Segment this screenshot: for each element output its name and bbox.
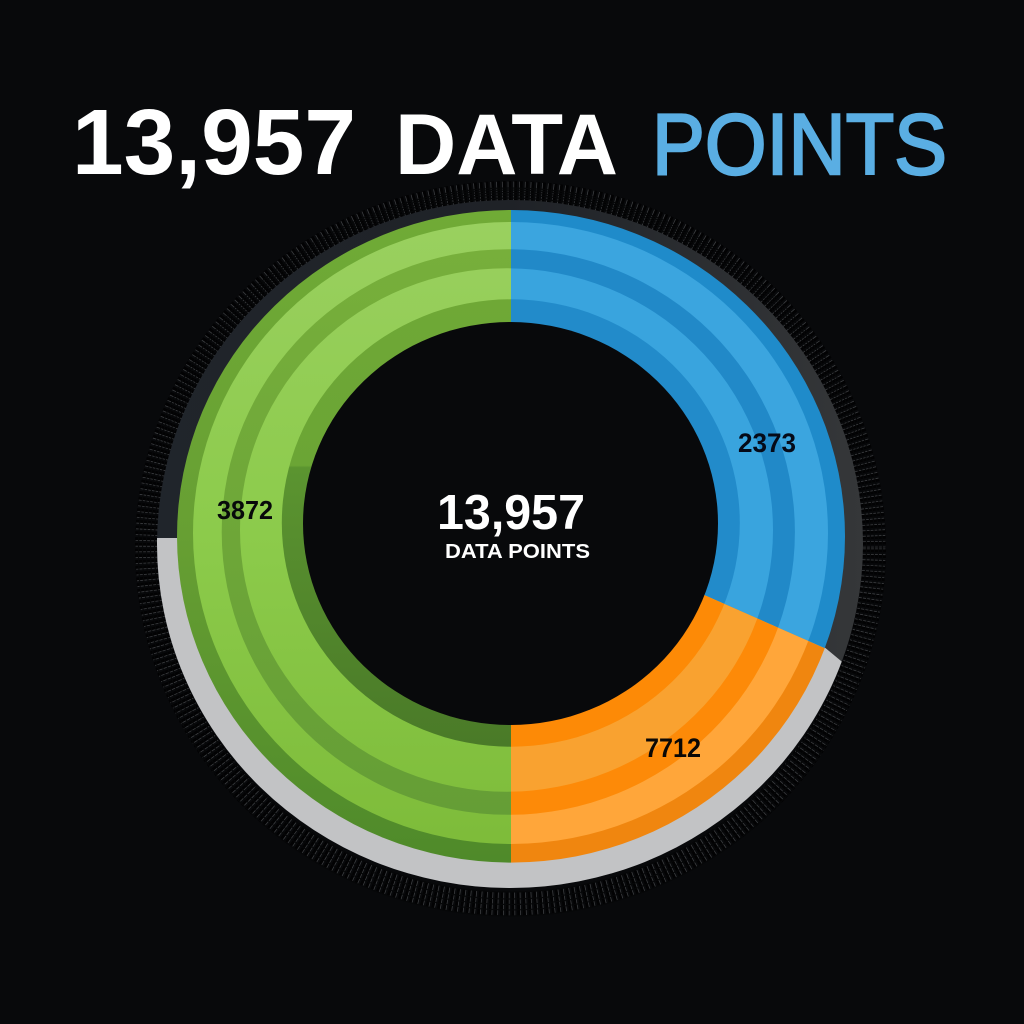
dark outer track: [157, 200, 863, 888]
segment: blue 2373: [511, 210, 845, 648]
centre total: 13,957: [437, 486, 585, 540]
label: 3872: 3872: [217, 495, 273, 525]
outer tick ring: [138, 188, 882, 916]
donut hole: [303, 322, 718, 725]
label: 7712: 7712: [645, 733, 701, 763]
infographic canvas: [78, 109, 944, 916]
centre total: DATA POINTS: [445, 541, 590, 563]
segment: green 3872: [177, 210, 511, 863]
label: 2373: 2373: [738, 428, 796, 458]
title: [72, 90, 947, 194]
centre total: [437, 486, 590, 563]
title: DATA: [395, 97, 618, 193]
segment: orange 7712: [511, 595, 825, 863]
grey outer arc: [157, 538, 842, 888]
title: 13,957: [72, 90, 356, 194]
title: POINTS: [652, 97, 947, 193]
donut chart: [138, 188, 882, 916]
